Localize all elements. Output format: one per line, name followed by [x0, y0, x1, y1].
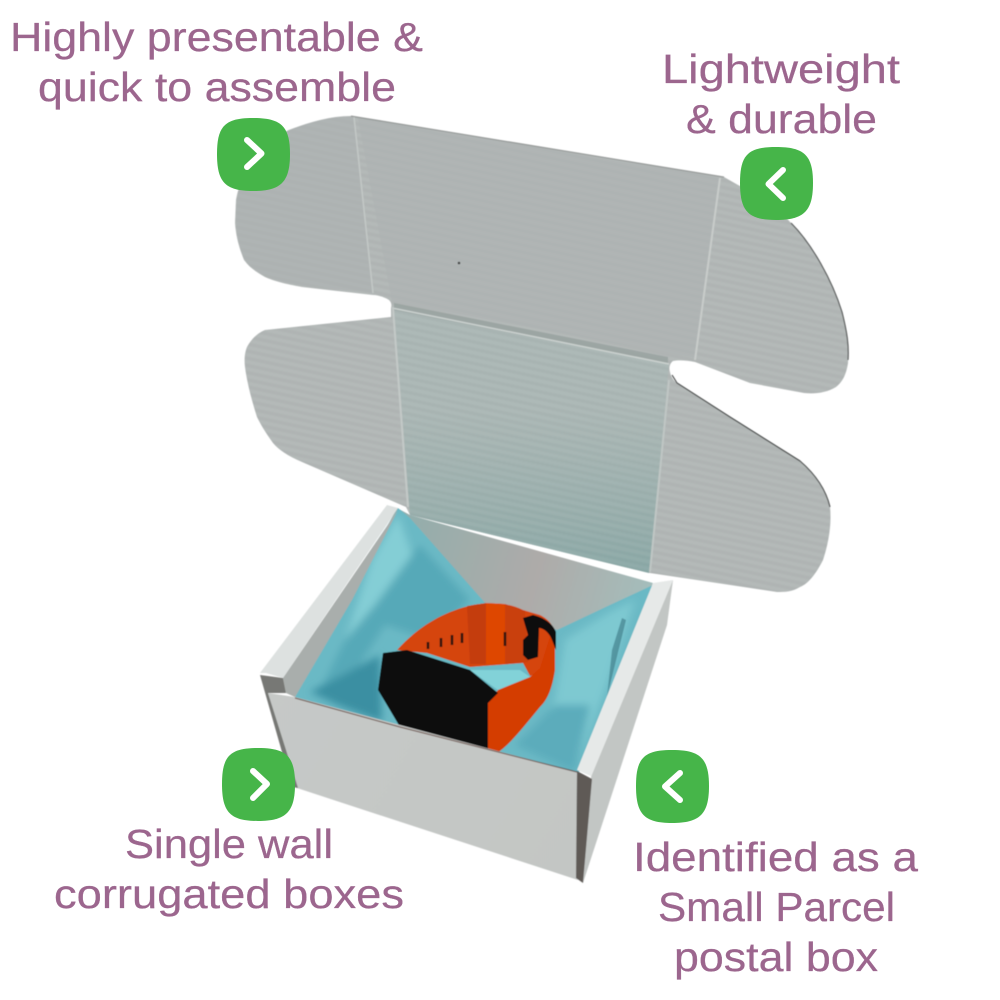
text: single wall corrugated boxes — [54, 821, 404, 917]
text: small parcel postal box: postal box — [674, 934, 879, 980]
text: highly presentable: Highly presentable & — [10, 14, 423, 60]
orange watch strap — [397, 603, 556, 753]
lid lower shading — [394, 308, 669, 573]
front left seam — [260, 675, 298, 788]
button: bottom left arrow — [222, 748, 295, 821]
text: single wall corrugated boxes: corrugated boxes — [54, 871, 404, 917]
open lid with flaps — [235, 116, 848, 592]
upper band — [397, 603, 555, 676]
text: lightweight and durable — [662, 46, 901, 142]
left box rim — [260, 505, 398, 678]
text: highly presentable — [10, 14, 423, 110]
button: bottom right arrow — [636, 750, 709, 823]
right outer wall — [583, 580, 673, 883]
front right seam — [576, 771, 592, 883]
buckle — [523, 615, 556, 660]
button: top left arrow — [217, 118, 290, 191]
open box with watch — [235, 116, 848, 883]
text: small parcel postal box: Identified as a — [633, 834, 918, 880]
text: lightweight and durable: Lightweight — [662, 46, 901, 92]
text: single wall corrugated boxes: Single wall — [125, 821, 333, 867]
text: lightweight and durable: & durable — [686, 96, 877, 142]
lower band — [488, 630, 555, 753]
text: small parcel postal box — [633, 834, 918, 980]
text: highly presentable: quick to assemble — [38, 64, 396, 110]
fold bands — [394, 303, 668, 364]
text: small parcel postal box: Small Parcel — [658, 884, 895, 930]
black watch face — [378, 650, 498, 750]
cut edges — [351, 116, 724, 177]
right box rim — [577, 580, 673, 777]
box inside back wall — [295, 508, 653, 775]
front wall — [268, 693, 578, 880]
blue tissue paper — [295, 508, 653, 777]
button: top right arrow — [740, 147, 813, 220]
